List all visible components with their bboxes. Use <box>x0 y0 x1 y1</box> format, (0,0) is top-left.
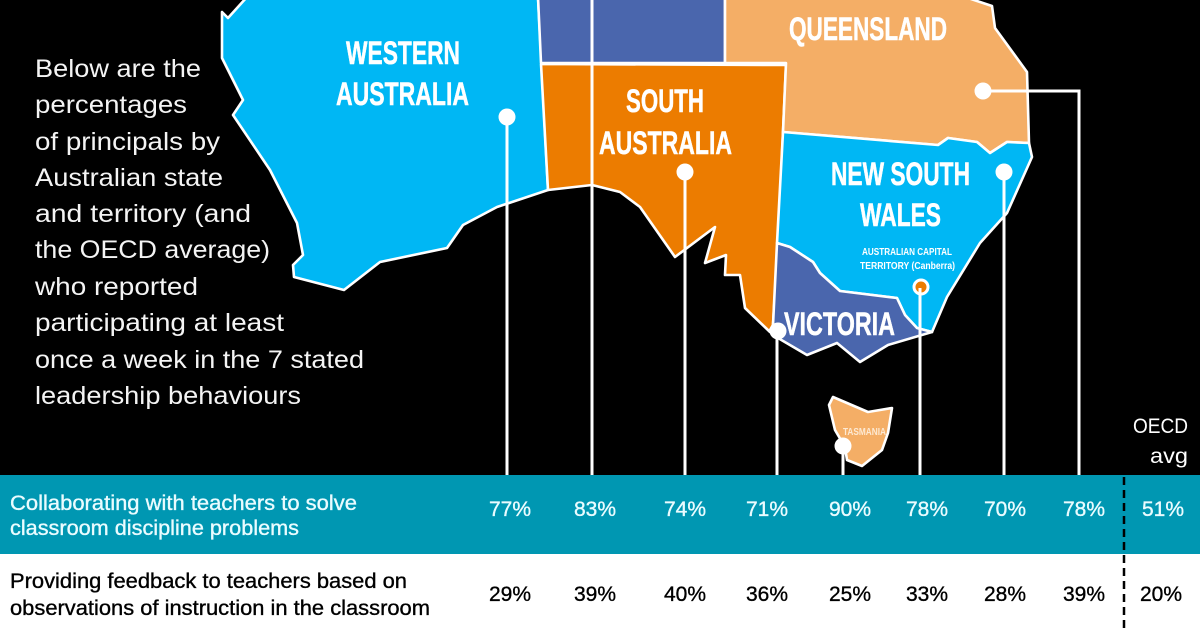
row 2 values: 39% <box>1063 583 1105 606</box>
label: Western Australia: AUSTRALIA <box>336 76 469 112</box>
marker: South Australia <box>676 164 694 476</box>
label: Western Australia: WESTERN <box>346 35 460 71</box>
row 2 values: 40% <box>664 583 706 606</box>
row 1 values: 78% <box>1063 498 1105 521</box>
label: Tasmania: TASMANIA <box>843 427 886 438</box>
row 2 values: 33% <box>906 583 948 606</box>
state: Northern Territory <box>538 0 725 63</box>
row 2 label: Providing feedback to teachers based on <box>10 570 407 593</box>
intro text block <box>34 55 364 410</box>
state: Western Australia <box>222 0 548 290</box>
label: Australian Capital Territory <box>860 247 955 272</box>
intro text block: participating at least <box>35 309 284 337</box>
label: South Australia: AUSTRALIA <box>599 125 732 161</box>
state: Tasmania <box>829 397 892 466</box>
label: Australian Capital Territory: AUSTRALIAN CAPITAL <box>862 247 952 258</box>
row 1 values: 74% <box>664 498 706 521</box>
label: Australian Capital Territory: TERRITORY (Canberra) <box>860 261 955 272</box>
state: Queensland <box>725 0 1029 153</box>
row 1 values: 78% <box>906 498 948 521</box>
marker: Australian Capital Territory <box>914 280 928 476</box>
row 2 values <box>489 583 1182 606</box>
map of Australia <box>222 0 1032 466</box>
row 2 values: 25% <box>829 583 871 606</box>
label: Western Australia <box>336 35 469 112</box>
marker: Northern Territory <box>590 0 594 476</box>
marker: New South Wales <box>996 164 1012 476</box>
row 2 values: 36% <box>746 583 788 606</box>
label: New South Wales: WALES <box>860 197 941 233</box>
label: New South Wales <box>831 156 970 233</box>
row 1 label: Collaborating with teachers to solve <box>10 492 357 515</box>
row 1 values: 90% <box>829 498 871 521</box>
state: Victoria <box>770 243 932 362</box>
marker: Western Australia <box>498 108 516 476</box>
label: Victoria: VICTORIA <box>784 306 895 342</box>
label: New South Wales: NEW SOUTH <box>831 156 970 192</box>
intro text block: Below are the <box>35 55 201 83</box>
label: South Australia: SOUTH <box>626 83 704 119</box>
OECD average column heading: avg <box>1150 445 1188 468</box>
region labels <box>336 11 970 438</box>
row 2 values: 28% <box>984 583 1026 606</box>
intro text block: the OECD average) <box>35 236 270 264</box>
marker: Victoria <box>770 322 786 476</box>
label: South Australia <box>599 83 732 161</box>
row 1 values: 77% <box>489 498 531 521</box>
row 1 values <box>489 498 1184 521</box>
intro text block: percentages <box>35 91 187 119</box>
OECD dashed divider <box>1123 477 1125 630</box>
row 2 values: 39% <box>574 583 616 606</box>
row 2 label <box>10 570 430 620</box>
row 1 values: 71% <box>746 498 788 521</box>
label: Queensland: QUEENSLAND <box>789 11 947 47</box>
intro text block: once a week in the 7 stated <box>35 346 364 374</box>
intro text block: of principals by <box>35 128 221 156</box>
marker: Queensland <box>974 82 1079 476</box>
table row 1: collaborating <box>0 475 1200 554</box>
row 2 values: 20% <box>1140 583 1182 606</box>
row 1 label <box>10 492 357 540</box>
intro text block: and territory (and <box>35 200 251 228</box>
row 2 values: 29% <box>489 583 531 606</box>
table row 2: providing feedback <box>0 554 1200 630</box>
OECD average column heading <box>1133 415 1188 468</box>
marker: Tasmania <box>834 438 852 476</box>
connector lines and markers <box>498 0 1079 476</box>
OECD average column heading: OECD <box>1133 415 1188 438</box>
intro text block: Australian state <box>35 164 223 192</box>
intro text block: who reported <box>34 273 198 301</box>
state: New South Wales <box>777 132 1032 332</box>
row 1 values: 83% <box>574 498 616 521</box>
row 1 label: classroom discipline problems <box>10 517 299 540</box>
row 2 label: observations of instruction in the classroom <box>10 597 430 620</box>
row 1 values: 51% <box>1142 498 1184 521</box>
intro text block: leadership behaviours <box>35 382 301 410</box>
row 1 values: 70% <box>984 498 1026 521</box>
state: South Australia <box>541 64 786 332</box>
